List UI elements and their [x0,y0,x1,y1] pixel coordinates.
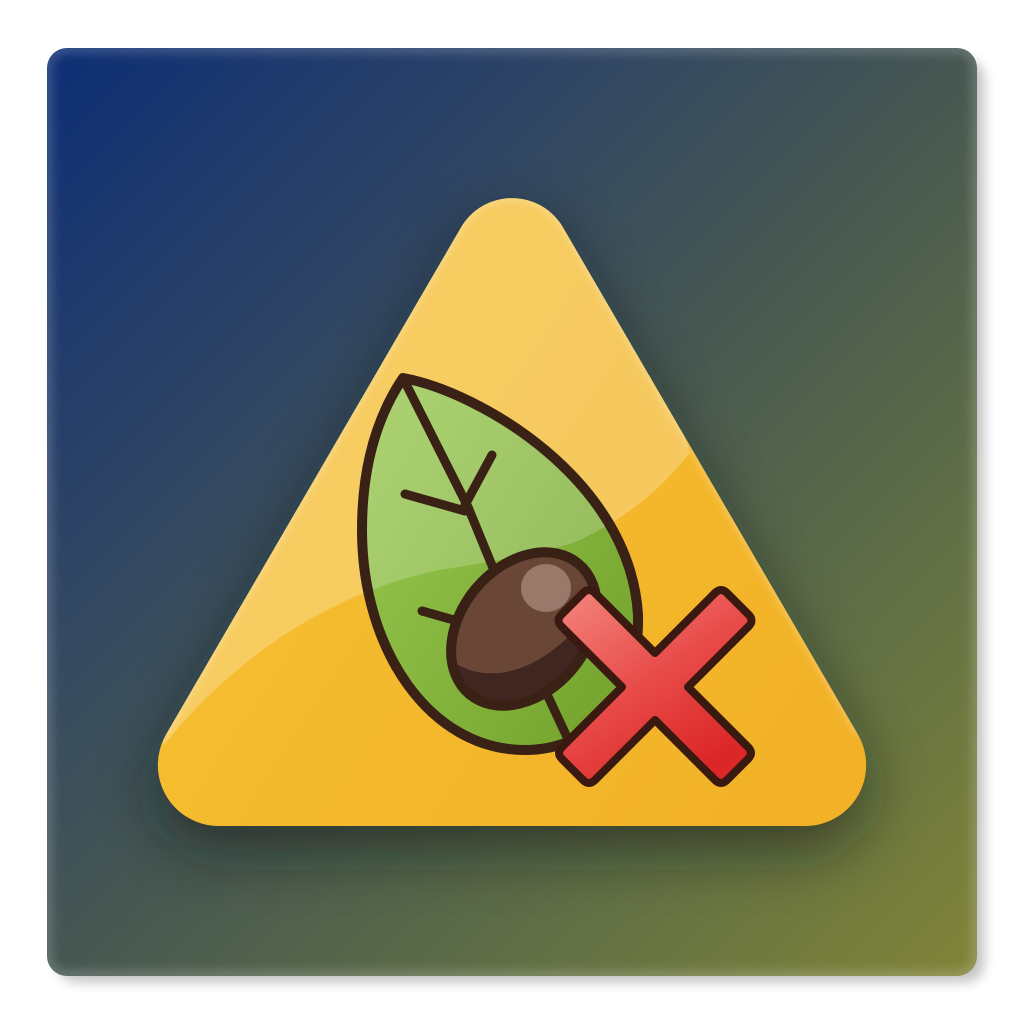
icon: seed bug [446,547,600,711]
icon: red cross [558,590,752,783]
warning triangle [150,180,866,830]
warning triangle shadow [158,223,866,850]
icon: leaf [357,373,644,755]
